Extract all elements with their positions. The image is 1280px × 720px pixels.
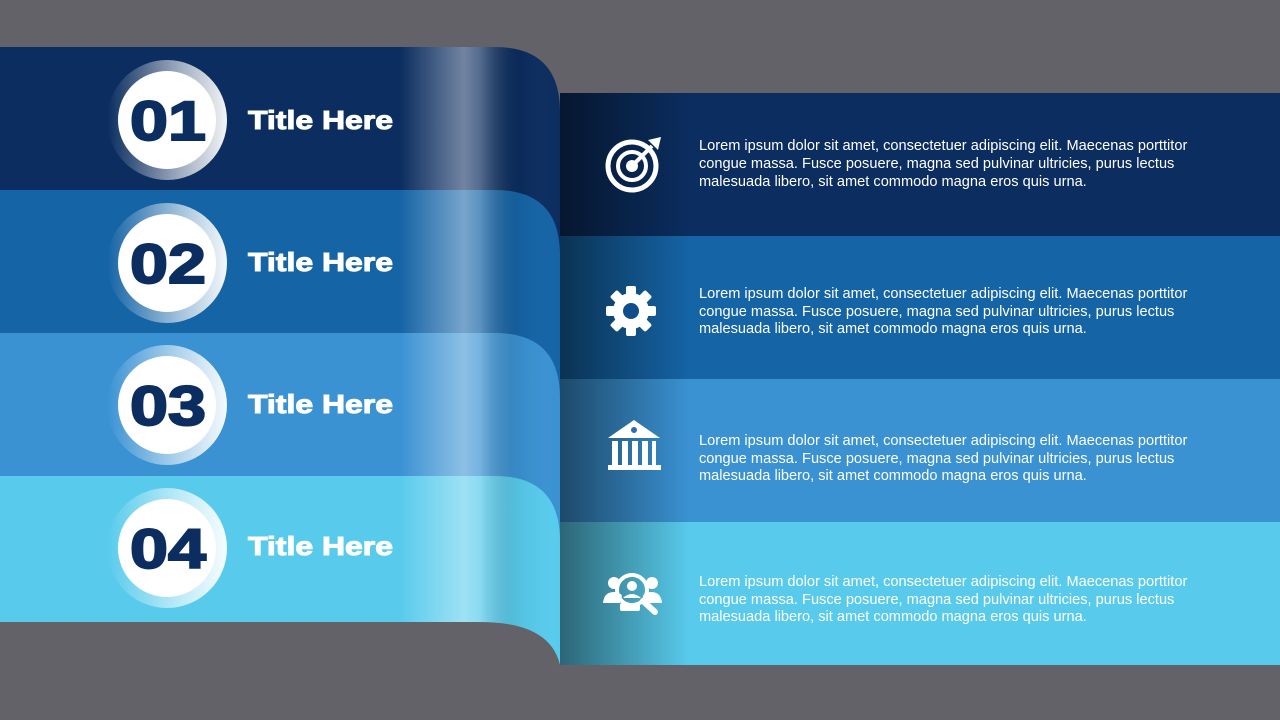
badge 01 — [107, 60, 227, 180]
badge 02: 02 — [130, 232, 206, 295]
icon: people search — [603, 575, 662, 612]
badge 01: 01 — [130, 89, 206, 152]
text block 2: congue massa. Fusce posuere, magna sed pulvinar ultricies, purus lectus — [699, 304, 1174, 320]
text block 1: congue massa. Fusce posuere, magna sed pulvinar ultricies, purus lectus — [699, 156, 1174, 172]
panel: left band 3 — [0, 333, 560, 540]
text block 4: malesuada libero, sit amet commodo magna eros quis urna. — [699, 609, 1087, 625]
badge 03: 03 — [130, 374, 206, 437]
icon: target — [608, 137, 661, 190]
panel: left band 2 — [0, 190, 560, 400]
title 2: Title Here — [248, 247, 393, 277]
title 4: Title Here — [248, 531, 393, 561]
text block 2: malesuada libero, sit amet commodo magna eros quis urna. — [699, 321, 1087, 337]
text block 3: congue massa. Fusce posuere, magna sed pulvinar ultricies, purus lectus — [699, 451, 1174, 467]
badge 02 — [107, 203, 227, 323]
title 3: Title Here — [248, 389, 393, 419]
text block 4: Lorem ipsum dolor sit amet, consectetuer adipiscing elit. Maecenas porttitor — [699, 574, 1187, 590]
text block 2: Lorem ipsum dolor sit amet, consectetuer adipiscing elit. Maecenas porttitor — [699, 286, 1187, 302]
text block 1: Lorem ipsum dolor sit amet, consectetuer adipiscing elit. Maecenas porttitor — [699, 138, 1187, 154]
text block 4: congue massa. Fusce posuere, magna sed pulvinar ultricies, purus lectus — [699, 592, 1174, 608]
text block 3: Lorem ipsum dolor sit amet, consectetuer adipiscing elit. Maecenas porttitor — [699, 433, 1187, 449]
badge 04 — [107, 488, 227, 608]
panel: right bands — [560, 93, 1280, 665]
icon: gear — [606, 286, 656, 336]
badge 04: 04 — [130, 517, 206, 580]
text block 1: malesuada libero, sit amet commodo magna eros quis urna. — [699, 174, 1087, 190]
badge 03 — [107, 345, 227, 465]
panel: left band 1 — [0, 47, 560, 260]
title 1: Title Here — [248, 105, 393, 135]
icon: bank — [608, 420, 661, 470]
text block 3: malesuada libero, sit amet commodo magna eros quis urna. — [699, 468, 1087, 484]
panel: left band 4 — [0, 476, 560, 665]
